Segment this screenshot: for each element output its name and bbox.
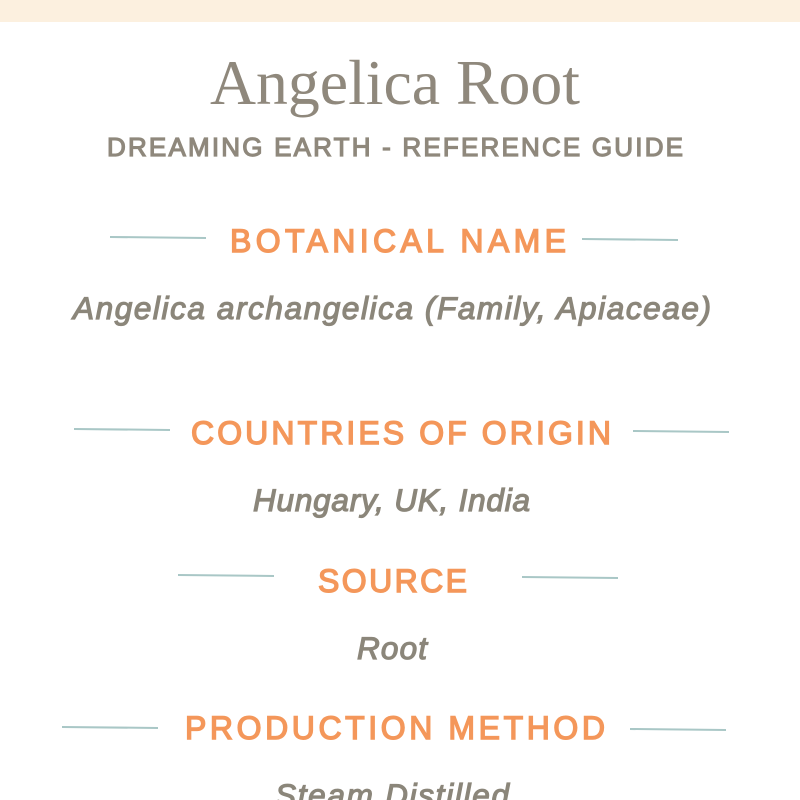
text: botanical name value: Angelica archangelica (Family, Apiaceae) bbox=[71, 290, 711, 326]
heading: source: SOURCE bbox=[318, 563, 467, 599]
subtitle: DREAMING EARTH - REFERENCE GUIDE bbox=[107, 132, 683, 162]
top cream band bbox=[0, 0, 800, 22]
title: Angelica Root bbox=[210, 47, 580, 118]
heading: botanical name: BOTANICAL NAME bbox=[230, 223, 566, 259]
heading: countries of origin: COUNTRIES OF ORIGIN bbox=[191, 415, 611, 451]
text: countries value: Hungary, UK, India bbox=[253, 482, 530, 518]
heading: production method: PRODUCTION METHOD bbox=[185, 710, 605, 746]
text: source value: Root bbox=[357, 630, 428, 666]
